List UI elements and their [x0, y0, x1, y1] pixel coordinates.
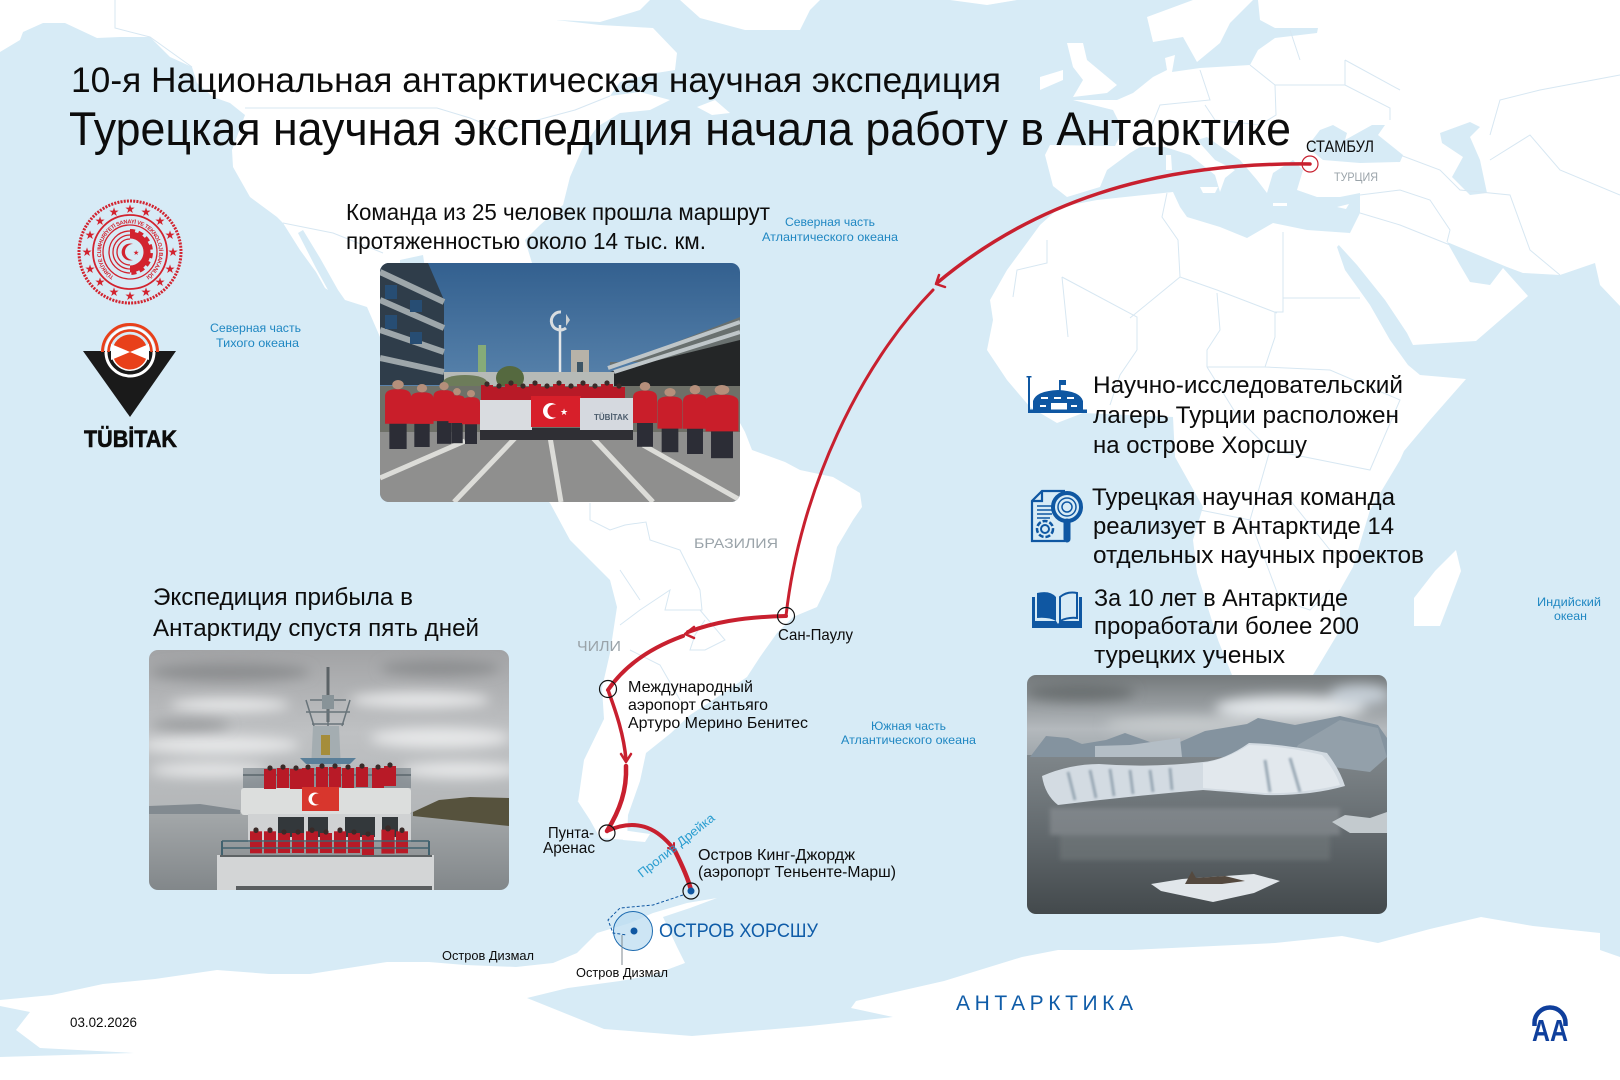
ocean label: Indian: Индийский: [1537, 595, 1601, 609]
marker: King George Island: Остров Кинг-Джордж: [698, 847, 855, 864]
label: Dismal Island with leader: [576, 935, 668, 980]
logo: ministry seal: ★: [155, 275, 165, 289]
logo: ministry seal: ★: [85, 228, 95, 242]
stat: research camp: лагерь Турции расположен: [1093, 402, 1399, 429]
logo: ministry seal: ★: [165, 262, 175, 276]
ocean label: North Pacific: [210, 321, 301, 350]
marker: Sao Paulo: [778, 608, 853, 644]
country label: Brazil: БРАЗИЛИЯ: [694, 535, 778, 551]
text block: arrival: Антарктиду спустя пять дней: [153, 615, 479, 642]
logo: Anadolu Agency: AA: [1532, 1013, 1568, 1048]
title block: 10-я Национальная антарктическая научная экспедиция: [71, 61, 1001, 100]
marker: Istanbul: СТАМБУЛ: [1306, 138, 1374, 156]
marker: Punta Arenas: Пунта-: [548, 825, 594, 842]
marker: Santiago: Международный: [628, 679, 753, 696]
text block: arrival: [153, 584, 479, 642]
marker: King George Island: (аэропорт Теньенте-Марш): [698, 864, 896, 881]
marker: Santiago: аэропорт Сантьяго: [628, 697, 768, 714]
ocean label: South Atlantic: [841, 719, 976, 747]
logo: ministry seal: ★: [95, 275, 105, 289]
logo: ministry seal: ★: [85, 262, 95, 276]
stat: scientists: [1032, 585, 1359, 669]
logo: ministry seal: ★: [109, 205, 119, 219]
logo: ministry seal: ★: [155, 214, 165, 228]
country label: Chile: ЧИЛИ: [577, 638, 621, 655]
icon: research magnifier: [1032, 491, 1081, 541]
icon: camp: [1026, 376, 1087, 413]
stat: scientists: За 10 лет в Антарктиде: [1094, 585, 1348, 612]
title block: Турецкая научная экспедиция начала работу в Антарктике: [69, 102, 1291, 155]
logo: ministry seal: ★: [82, 245, 92, 259]
stat: scientists: турецких ученых: [1094, 642, 1285, 669]
photo: iceberg and seal: [1025, 675, 1390, 914]
title block: [69, 61, 1291, 155]
marker: Santiago: Артуро Мерино Бенитес: [628, 715, 808, 732]
stat: scientists: проработали более 200: [1094, 613, 1359, 640]
text block: team route: [346, 199, 770, 254]
marker: Punta Arenas: [543, 825, 615, 857]
marker: Istanbul: [1302, 138, 1374, 172]
ocean label: North Pacific: Тихого океана: [216, 336, 299, 350]
photo: team at airport: [380, 263, 740, 502]
date: 03.02.2026: [70, 1014, 137, 1030]
stat: scientific projects: [1032, 484, 1424, 569]
logo: ministry seal: [78, 200, 182, 304]
label: Drake Passage: Пролив Дрейка: [635, 811, 717, 880]
logo: TUBITAK: TÜBİTAK: [84, 426, 178, 453]
logo: ministry seal: ★: [141, 285, 151, 299]
marker: Sao Paulo: Сан-Паулу: [778, 627, 853, 644]
label: Antarctica: АНТАРКТИКА: [956, 992, 1133, 1015]
stat: scientific projects: отдельных научных проектов: [1093, 542, 1424, 569]
stat: scientific projects: Турецкая научная команда: [1092, 484, 1396, 511]
stat: research camp: на острове Хорсшу: [1093, 432, 1307, 459]
logo: ministry seal: ★: [125, 289, 135, 303]
ocean label: South Atlantic: Атлантического океана: [841, 733, 976, 747]
stat: research camp: Научно-исследовательский: [1093, 372, 1403, 399]
icon: book: [1032, 592, 1082, 628]
photo: research ship: [140, 650, 520, 890]
label: Dismal Island with leader: Остров Дизмал: [576, 965, 668, 980]
logo: ministry seal: TÜRKİYE CUMHURİYETİ SANAYİ VE TEKNOLOJİ BAKANLIĞI: [97, 219, 164, 280]
map: inland seas: [1307, 122, 1487, 195]
ocean label: North Atlantic: [762, 215, 898, 244]
logo: ministry seal: ★: [168, 245, 178, 259]
ocean label: North Atlantic: Северная часть: [785, 215, 875, 229]
logo: ministry seal: ★: [109, 285, 119, 299]
photo: team at airport: ★: [560, 407, 568, 417]
logo: ministry seal: ★: [141, 205, 151, 219]
stat: scientific projects: реализует в Антарктиде 14: [1093, 513, 1394, 540]
logo: ministry seal: ★: [133, 249, 139, 257]
text block: team route: Команда из 25 человек прошла маршрут: [346, 199, 770, 225]
marker: Santiago: [600, 679, 808, 732]
marker: Horseshoe Island: ОСТРОВ ХОРСШУ: [659, 921, 819, 942]
flight route: [607, 164, 1310, 890]
label: Dismal Island: Остров Дизмал: [442, 948, 534, 963]
stat: research camp: [1026, 372, 1403, 459]
marker: Horseshoe Island: [608, 895, 819, 950]
text block: arrival: Экспедиция прибыла в: [153, 584, 413, 611]
ocean label: Indian: океан: [1554, 609, 1587, 623]
logo: ministry seal: ★: [95, 214, 105, 228]
marker: Punta Arenas: Аренас: [543, 840, 595, 857]
ocean label: South Atlantic: Южная часть: [871, 719, 946, 733]
map: coastal bay: [0, 1006, 134, 1057]
country label: Turkey: ТУРЦИЯ: [1334, 172, 1378, 184]
marker: King George Island: [683, 847, 896, 899]
logo: TUBITAK: [83, 324, 178, 453]
logo: ministry seal: ★: [165, 228, 175, 242]
ocean label: North Atlantic: Атлантического океана: [762, 230, 898, 244]
text block: team route: протяженностью около 14 тыс. км.: [346, 228, 706, 254]
logo: ministry seal: ★: [125, 202, 135, 216]
map: country borders: [115, 0, 1620, 700]
ocean label: Indian: [1537, 595, 1601, 623]
ocean label: North Pacific: Северная часть: [210, 321, 301, 335]
photo: team at airport: TÜBİTAK: [594, 413, 629, 422]
